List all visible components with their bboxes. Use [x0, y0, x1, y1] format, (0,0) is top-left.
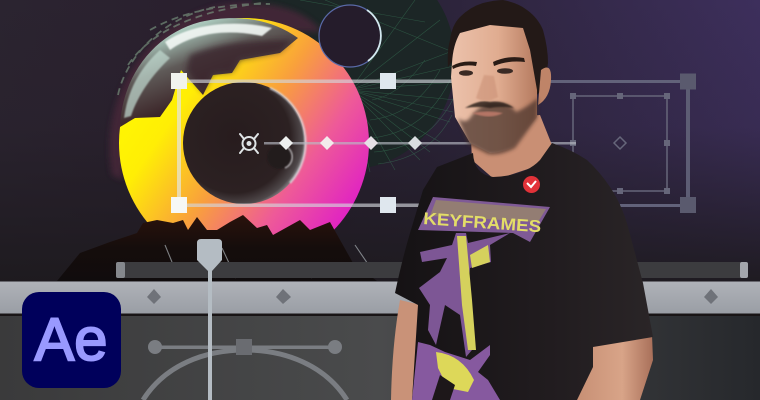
mountain glints	[165, 245, 372, 278]
playhead	[197, 239, 222, 400]
left arm	[391, 300, 421, 400]
motion path with keyframes	[264, 136, 576, 150]
lower panel	[0, 315, 760, 400]
transform box: corner handles	[171, 73, 696, 213]
sun disc with gradient	[119, 18, 369, 268]
neck	[470, 115, 552, 180]
dark moon in front of the sun	[183, 82, 305, 204]
background: dark purple backdrop	[0, 0, 760, 282]
jagged mountain silhouette	[57, 215, 377, 281]
wireframe grid sphere	[235, 0, 458, 172]
presenter	[391, 0, 653, 400]
badge	[523, 176, 540, 193]
shirt print: monster	[412, 342, 500, 400]
textured moon crescent	[120, 18, 298, 127]
anchor point icon	[240, 134, 258, 153]
mouth	[472, 112, 503, 116]
timeline track	[116, 262, 748, 278]
small planet	[319, 5, 381, 67]
ear	[538, 68, 551, 105]
inner selection square	[570, 93, 670, 194]
shirt print: lettering: KEYFRAMES	[423, 209, 542, 236]
t-shirt	[395, 143, 653, 400]
eyes	[459, 70, 473, 76]
shirt print: figure	[412, 233, 510, 400]
right arm	[576, 335, 653, 400]
After Effects logo	[22, 292, 121, 388]
timeline keyframe diamonds	[147, 289, 718, 304]
mustache	[465, 101, 514, 108]
transform box: selection lines	[177, 80, 690, 207]
hair	[448, 0, 548, 95]
face	[451, 25, 537, 153]
nose shadow	[476, 75, 498, 101]
timeline band	[0, 282, 760, 316]
shirt print: lettering	[418, 197, 550, 242]
eyebrows	[452, 57, 525, 69]
bezier curve handle	[143, 339, 347, 400]
After Effects logo: Ae	[34, 306, 108, 373]
beard	[458, 98, 538, 154]
halo of glitch fragments around the moon	[109, 3, 322, 180]
